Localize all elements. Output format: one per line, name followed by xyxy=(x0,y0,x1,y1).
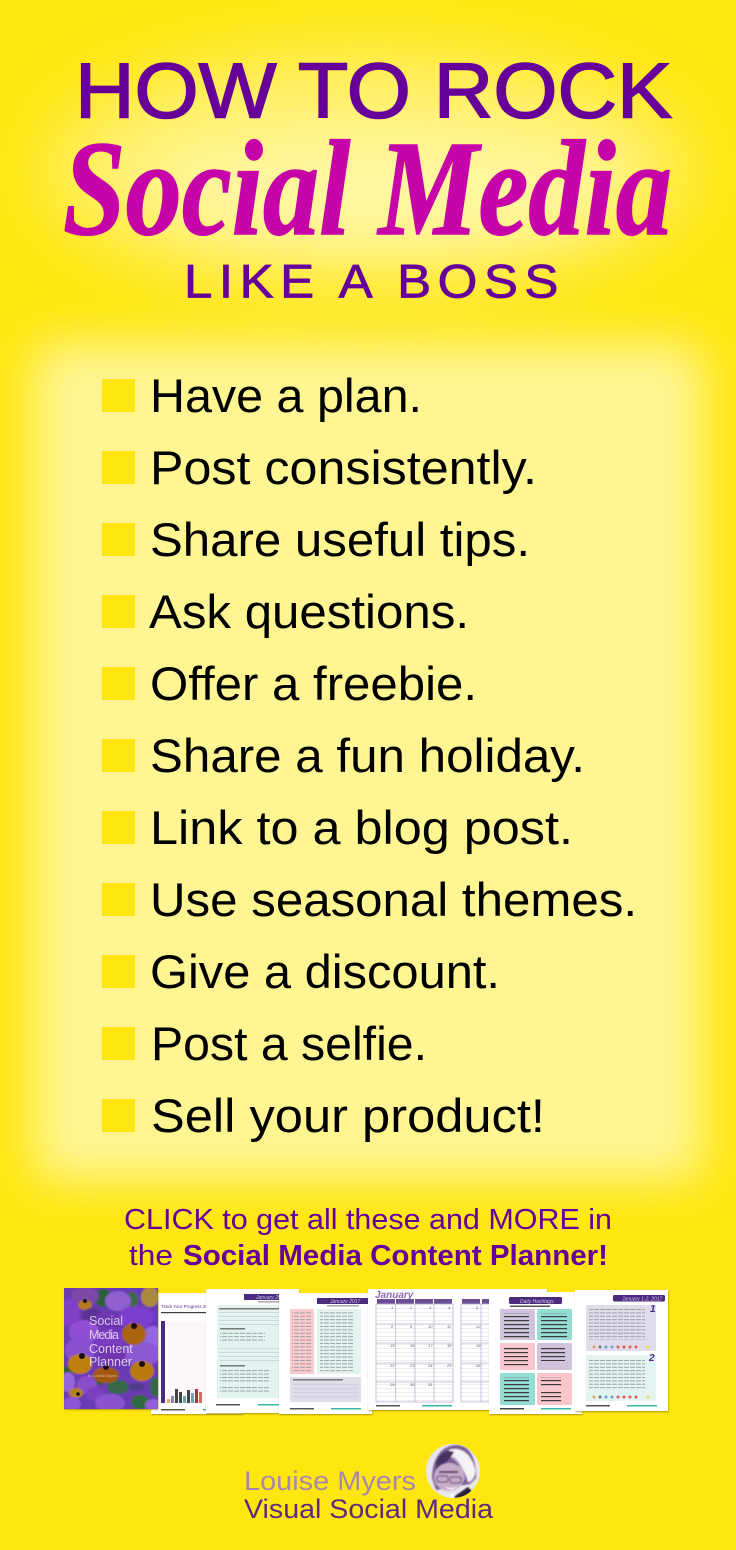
call to action xyxy=(124,1204,612,1272)
cover: planner with pansies: by Louise Myers xyxy=(88,1373,117,1378)
cover: planner with pansies: Social xyxy=(89,1314,123,1328)
item: share a fun holiday: Share a fun holiday. xyxy=(150,729,585,782)
item: offer a freebie: Offer a freebie. xyxy=(150,657,477,710)
cover: planner with pansies: Planner xyxy=(89,1355,132,1369)
item: give a discount: Give a discount. xyxy=(150,945,500,998)
logo: louise myers visual social media xyxy=(244,1444,494,1524)
page: calendar: 15 xyxy=(390,1343,395,1348)
checklist xyxy=(102,369,637,1142)
page: calendar: 24 xyxy=(427,1363,433,1368)
title glow xyxy=(48,55,688,285)
page: calendar: 5 xyxy=(476,1305,479,1310)
call to action: Social Media Content Planner! xyxy=(183,1240,608,1272)
item: post consistently: Post consistently. xyxy=(150,441,537,494)
page: daily plan: 1 xyxy=(650,1304,656,1315)
call to action: the xyxy=(129,1240,173,1272)
call to action: CLICK to get all these and MORE in xyxy=(124,1204,612,1236)
page: january goals xyxy=(206,1289,299,1413)
page: calendar: 9 xyxy=(410,1324,413,1329)
page: calendar: 12 xyxy=(476,1324,481,1329)
page: daily plan: 2 xyxy=(648,1353,655,1364)
cover: planner with pansies: Content xyxy=(89,1342,133,1356)
item: use seasonal themes: Use seasonal themes. xyxy=(150,873,637,926)
page: track your progress xyxy=(151,1293,243,1414)
item: sell your product: Sell your product! xyxy=(151,1089,545,1142)
petals xyxy=(71,1288,100,1304)
page: calendar: 29 xyxy=(389,1382,395,1387)
page: track your progress: Track Your Progress 2017 xyxy=(161,1304,213,1309)
page: calendar: 30 xyxy=(410,1382,415,1387)
page: daily hashtags: Daily Hashtags xyxy=(520,1299,554,1305)
page: calendar: 10 xyxy=(428,1324,433,1329)
page: calendar xyxy=(368,1289,547,1410)
item: share useful tips: Share useful tips. xyxy=(150,513,530,566)
heading: like a boss: LIKE A BOSS xyxy=(184,254,565,308)
page: calendar: 23 xyxy=(409,1363,415,1368)
page: calendar: 4 xyxy=(448,1305,451,1310)
page: calendar: 25 xyxy=(446,1363,452,1368)
page: calendar: 11 xyxy=(447,1324,451,1329)
planner preview pages xyxy=(60,1287,668,1414)
icon: author portrait xyxy=(426,1444,480,1498)
page: calendar: 17 xyxy=(428,1343,433,1348)
item: have a plan: Have a plan. xyxy=(150,369,422,422)
title xyxy=(63,46,672,308)
logo name: Louise Myers xyxy=(244,1466,416,1496)
cover: planner with pansies xyxy=(60,1287,163,1412)
heading: how to rock: HOW TO ROCK xyxy=(75,46,672,134)
page: calendar: 18 xyxy=(447,1343,452,1348)
page: calendar: 19 xyxy=(476,1343,481,1348)
panel: checklist glow background xyxy=(32,342,704,1182)
greenery xyxy=(95,1289,111,1307)
page: daily plan xyxy=(575,1290,668,1411)
page: calendar: 31 xyxy=(428,1382,432,1387)
page: calendar: 8 xyxy=(391,1324,394,1329)
page: calendar: 26 xyxy=(475,1363,481,1368)
page: calendar: 2 xyxy=(409,1305,413,1310)
page: calendar: January xyxy=(375,1290,414,1301)
page: january content: January 2017 xyxy=(329,1299,361,1305)
page: calendar: 3 xyxy=(429,1305,432,1310)
page: daily plan: January 1-2, 2017 xyxy=(621,1296,663,1302)
logo tagline: Visual Social Media xyxy=(244,1494,494,1524)
page: january goals: January 2017 xyxy=(255,1295,287,1301)
item: post a selfie: Post a selfie. xyxy=(151,1017,427,1070)
page: calendar: 1 xyxy=(391,1305,393,1310)
page: january content xyxy=(279,1293,372,1414)
page: calendar: 22 xyxy=(389,1363,395,1368)
page: calendar: 16 xyxy=(410,1343,415,1348)
cover: planner with pansies: Media xyxy=(89,1328,119,1342)
item: link to a blog post: Link to a blog post. xyxy=(150,801,573,854)
item: ask questions: Ask questions. xyxy=(149,585,469,638)
page: daily hashtags xyxy=(489,1292,582,1414)
